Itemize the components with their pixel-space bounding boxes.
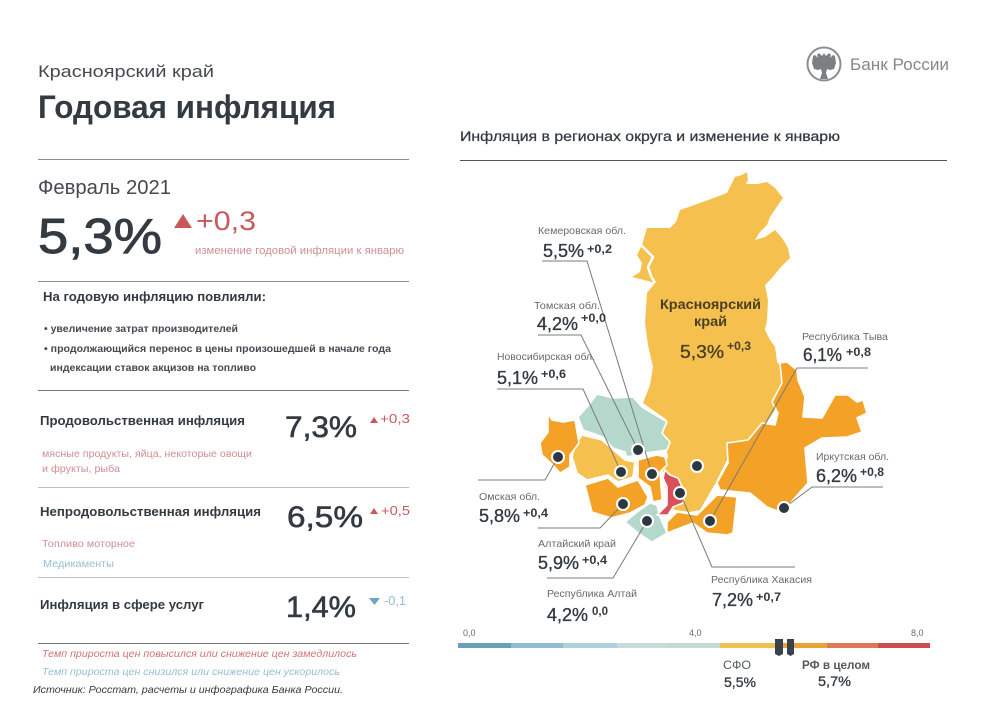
factors list: • увеличение затрат производителей	[44, 323, 238, 335]
region: Irkutsk oblast	[717, 362, 867, 513]
scale label: SFO: 5,5%	[724, 674, 756, 690]
scale ticks: 0,0	[463, 628, 476, 638]
region: Krasnoyarsk krai	[632, 172, 790, 512]
factors list: индексации ставок акцизов на топливо	[50, 362, 256, 374]
map: Siberian federal district	[540, 172, 867, 542]
legend: price growth down: Темп прироста цен снизился или снижение цен ускорилось	[42, 666, 340, 678]
change caption: изменение годовой инфляции к январю	[195, 245, 404, 257]
logo: Bank of Russia	[808, 48, 949, 80]
food change: +0,3	[380, 411, 410, 426]
icon: up triangle	[174, 214, 192, 228]
label: Irkutsk: 6,2%	[816, 466, 857, 486]
non-food value: 6,5%	[287, 501, 363, 534]
non-food note: fuel: Топливо моторное	[42, 539, 135, 550]
river channel in Krasnoyarsk krai	[641, 245, 655, 283]
label: Krasnoyarsk krai: 5,3%	[680, 342, 724, 362]
label: Altai krai: +0,4	[582, 553, 607, 567]
title: Годовая инфляция	[38, 89, 336, 125]
marker: SFO	[775, 639, 783, 656]
label: Tomsk: +0,0	[581, 311, 606, 325]
label: Altai republic: 0,0	[592, 604, 608, 618]
scale ticks: 8,0	[911, 628, 924, 638]
label: Altai krai	[538, 538, 616, 573]
leader lines	[478, 261, 883, 578]
label: Tomsk	[534, 300, 606, 334]
label: Omsk	[479, 491, 548, 526]
label: Krasnoyarsk krai: Красноярский	[660, 296, 761, 312]
icon: eagle emblem	[808, 48, 840, 80]
change value: +0,3	[196, 206, 256, 236]
period: Февраль 2021	[38, 177, 171, 199]
region: Tomsk oblast	[578, 394, 670, 457]
marker: Russia	[787, 639, 794, 656]
panel: non-food inflation	[40, 501, 410, 570]
label: Khakassia: 7,2%	[712, 590, 753, 610]
services heading: Инфляция в сфере услуг	[40, 597, 205, 612]
label: Krasnoyarsk krai	[660, 296, 761, 362]
label: Altai republic: Республика Алтай	[547, 588, 637, 600]
scale ticks	[463, 628, 924, 638]
label: Irkutsk: Иркутская обл.	[816, 451, 889, 463]
food note: и фрукты, рыба	[42, 463, 120, 475]
label: Tyva: +0,8	[846, 345, 871, 359]
panel: services inflation	[40, 591, 406, 624]
label: Irkutsk	[816, 451, 889, 486]
label: Novosibirsk	[497, 351, 595, 388]
region: Kemerovo oblast	[638, 455, 667, 502]
region: Khakassia	[657, 470, 685, 515]
label: Kemerovo: +0,2	[587, 242, 612, 256]
label: Khakassia: +0,7	[756, 590, 781, 604]
scale ticks: 4,0	[689, 628, 702, 638]
region: Altai republic	[625, 503, 667, 542]
label: Kemerovo: 5,5%	[543, 241, 584, 261]
label: Altai republic	[547, 588, 637, 625]
icon: up triangle	[370, 417, 378, 423]
label: Altai republic: 4,2%	[547, 605, 588, 625]
colour scale	[458, 628, 930, 656]
region: Omsk oblast	[540, 413, 579, 473]
food value: 7,3%	[285, 411, 357, 444]
services change: -0,1	[384, 593, 406, 608]
scale label: SFO: СФО	[723, 658, 751, 672]
panel: food inflation	[40, 411, 410, 475]
scale bar	[458, 643, 930, 648]
label: Khakassia	[711, 574, 812, 610]
label: Tyva: 6,1%	[803, 345, 842, 365]
non-food note: medicines: Медикаменты	[43, 559, 114, 570]
label: Kemerovo: Кемеровская обл.	[538, 225, 626, 237]
factors heading: На годовую инфляцию повлияли:	[43, 290, 266, 304]
region: Tyva	[667, 495, 737, 535]
label: Novosibirsk: 5,1%	[497, 368, 538, 388]
map heading: Инфляция в регионах округа и изменение к январю	[460, 129, 840, 144]
subtitle: region name: Красноярский край	[38, 62, 214, 81]
label: Irkutsk: +0,8	[860, 465, 884, 479]
panel: headline inflation	[38, 177, 404, 264]
legend: colour notes	[42, 648, 357, 678]
non-food change: +0,5	[381, 503, 410, 518]
icon: up triangle	[370, 508, 378, 514]
label: Altai krai: 5,9%	[538, 553, 579, 573]
food heading: Продовольственная инфляция	[40, 413, 245, 428]
food note	[42, 448, 252, 475]
scale label: Russia	[802, 660, 870, 689]
services value: 1,4%	[286, 591, 356, 624]
region: Novosibirsk oblast	[572, 435, 635, 482]
label: Novosibirsk: +0,6	[541, 367, 566, 381]
region markers	[552, 444, 790, 527]
label: Novosibirsk: Новосибирская обл.	[497, 351, 595, 363]
non-food heading: Непродовольственная инфляция	[40, 504, 261, 519]
logo wordmark: Банк России	[850, 55, 949, 74]
icon: down triangle	[369, 598, 380, 605]
label: Omsk: +0,4	[523, 506, 548, 520]
scale label: SFO	[723, 658, 756, 690]
label: Omsk: Омская обл.	[479, 491, 540, 503]
factors list: • продолжающийся перенос в цены произошедшей в начале года	[44, 343, 391, 355]
label: Tyva	[802, 331, 888, 365]
region: Altai krai	[585, 478, 648, 518]
scale label: Russia: 5,7%	[818, 673, 851, 689]
label: Omsk: 5,8%	[479, 506, 520, 526]
scale label: Russia: РФ в целом	[802, 660, 870, 672]
label: Altai krai: Алтайский край	[538, 538, 616, 550]
factors list	[44, 323, 391, 374]
label: Tomsk: Томская обл.	[534, 300, 600, 312]
source: Источник: Росстат, расчеты и инфографика Банка России.	[33, 684, 343, 696]
label: Krasnoyarsk krai: край	[694, 313, 727, 329]
label: Tomsk: 4,2%	[537, 314, 578, 334]
legend: price growth up: Темп прироста цен повысился или снижение цен замедлилось	[42, 648, 357, 660]
headline value: 5,3%	[38, 210, 162, 264]
panel: factors	[43, 290, 391, 374]
label: Krasnoyarsk krai: +0,3	[727, 339, 751, 353]
label: Tyva: Республика Тыва	[802, 331, 888, 343]
food note: мясные продукты, яйца, некоторые овощи	[42, 448, 252, 460]
label: Khakassia: Республика Хакасия	[711, 574, 812, 586]
label: Kemerovo	[538, 225, 626, 261]
